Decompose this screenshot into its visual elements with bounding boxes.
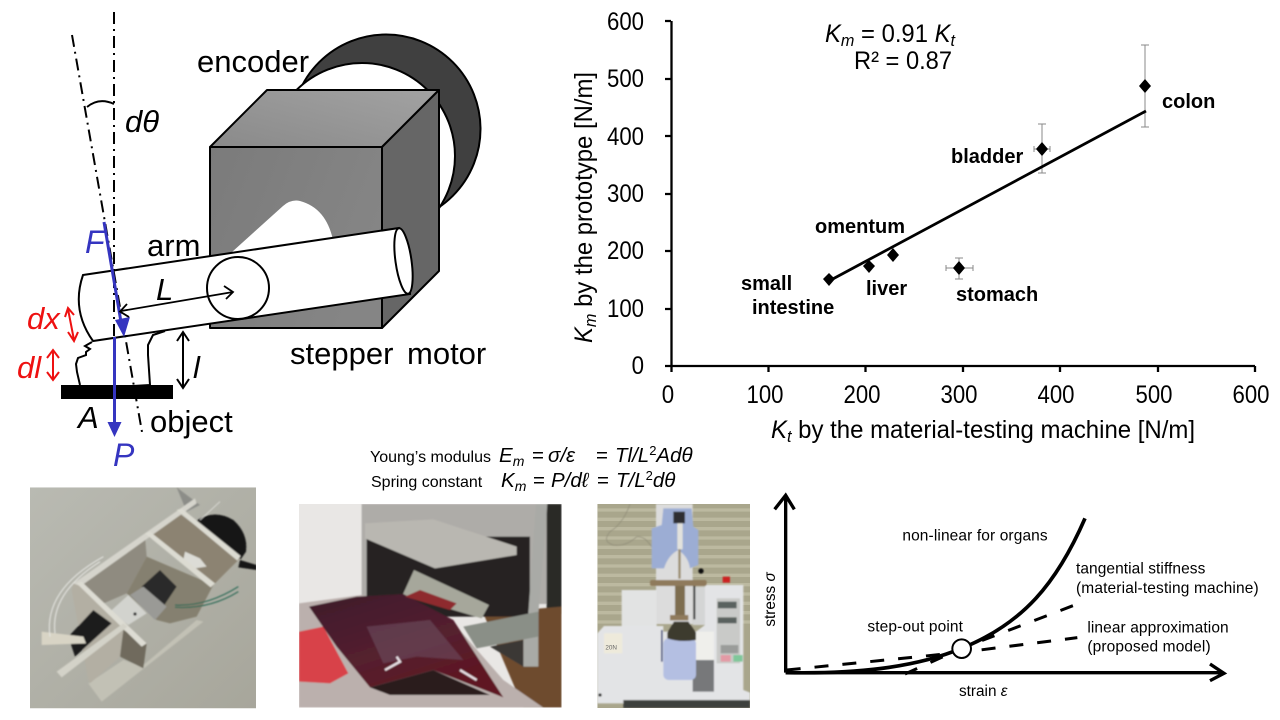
x axis label: strain ε: [959, 683, 1008, 700]
label: A: A: [76, 400, 99, 435]
spring constant equation: m: [515, 478, 527, 494]
y tick labels: 600: [607, 8, 644, 36]
regression equation: = 0.91: [854, 20, 935, 48]
vertical reference line: [113, 12, 115, 338]
regression equation: K: [825, 20, 854, 50]
organ labels: colon: [1162, 91, 1215, 113]
organ labels: intestine: [752, 297, 834, 319]
label: encoder: encoder: [197, 44, 309, 79]
y tick labels: [607, 8, 644, 380]
linear approximation line: [787, 638, 1077, 670]
organ labels: small: [741, 273, 792, 295]
Young's modulus equation: =: [532, 444, 544, 467]
label: F: F: [85, 224, 107, 260]
Young's modulus equation: Tl/L: [615, 444, 649, 467]
y tick labels: 300: [607, 180, 644, 208]
y axis title: by the prototype [N/m]: [570, 72, 598, 314]
tangential stiffness line: [905, 604, 1077, 674]
label: step-out point: step-out point: [867, 619, 964, 636]
spring constant equation: P/dℓ: [551, 469, 590, 492]
regression equation: t: [950, 31, 956, 50]
tilted reference line: [72, 35, 142, 432]
label: dx: dx: [27, 301, 61, 336]
label: arm: arm: [147, 228, 200, 263]
angle arc: [87, 101, 114, 107]
label: stepper motor: stepper: [290, 336, 393, 371]
arrow: length L: [120, 286, 233, 317]
organ labels: stomach: [956, 284, 1038, 306]
organ labels: [741, 91, 1215, 319]
panel: mechanism diagram: [17, 12, 486, 473]
label: linear approximation: linear approximation: [1087, 619, 1229, 636]
spring constant equation: 2: [646, 468, 653, 483]
y axis label: stress σ: [762, 572, 779, 627]
step-out point marker: [952, 639, 971, 658]
chart axes: [665, 21, 1255, 372]
panel: stress-strain chart: [762, 495, 1259, 700]
x tick labels: 100: [746, 381, 784, 409]
non-linear curve: [786, 518, 1085, 673]
Young's modulus equation: m: [513, 453, 525, 469]
icon: base plate: [61, 385, 173, 399]
organ labels: omentum: [815, 216, 905, 238]
icon: object tissue outline: [76, 331, 165, 386]
regression equation: m: [841, 31, 854, 50]
icon: stepper motor box: [210, 90, 439, 328]
equations block: [370, 443, 693, 494]
y tick labels: 0: [632, 352, 644, 380]
label: dl: dl: [17, 350, 42, 385]
arrow: dx: [65, 308, 78, 341]
photo: material testing machine: [597, 504, 750, 708]
data points: [823, 79, 1151, 286]
Young's modulus equation: E: [499, 444, 513, 467]
chart axes: [775, 495, 1224, 681]
organ labels: liver: [866, 278, 907, 300]
spring constant equation: =: [533, 469, 545, 492]
label: linear approximation: (proposed model): [1087, 639, 1211, 656]
x axis title: by the material-testing machine [N/m]: [792, 416, 1195, 444]
label: stepper motor: motor: [407, 336, 486, 371]
label: P: P: [113, 437, 135, 473]
x tick labels: 200: [844, 381, 880, 409]
y axis title: K: [570, 314, 600, 343]
photo: organ measurement: [299, 504, 562, 708]
Young's modulus equation: Adθ: [654, 444, 693, 467]
arrow: force P: [108, 337, 122, 437]
error bars: [946, 45, 1149, 279]
x tick labels: 400: [1038, 381, 1074, 409]
label: non-linear: non-linear for organs: [902, 528, 1048, 545]
R squared: R² = 0.87: [854, 47, 952, 75]
label: L: L: [156, 272, 173, 307]
y axis title: m: [581, 314, 600, 327]
x axis title: K: [771, 416, 793, 446]
y tick labels: 200: [607, 237, 644, 265]
spring constant equation: K: [501, 469, 516, 492]
spring constant equation: dθ: [653, 469, 675, 492]
Young's modulus equation: Young’s modulus: [370, 449, 491, 466]
x tick labels: [662, 381, 1270, 409]
y tick labels: 400: [607, 123, 644, 151]
label: l: l: [193, 350, 201, 385]
regression equation: K: [935, 20, 956, 50]
label: d-theta: dθ: [125, 104, 159, 139]
y tick labels: 500: [607, 65, 644, 93]
label: tangential stiffness: tangential stiffness: [1076, 561, 1206, 578]
x tick labels: 300: [940, 381, 978, 409]
arrow: dl: [47, 350, 59, 380]
y tick labels: 100: [607, 295, 644, 323]
organ labels: bladder: [951, 146, 1023, 168]
photo: material testing machine: 20N: [605, 644, 617, 651]
label: tangential stiffness: (material-testing machine): [1076, 580, 1259, 597]
x tick labels: 500: [1136, 381, 1172, 409]
Young's modulus equation: 2: [649, 443, 656, 458]
icon: cylindrical arm: [79, 227, 416, 341]
arrow: force F: [104, 222, 130, 337]
spring constant equation: Spring constant: [371, 474, 483, 491]
arrow: length l: [177, 332, 189, 388]
x tick labels: 600: [1232, 381, 1270, 409]
Young's modulus equation: σ/ε: [548, 444, 576, 467]
Young's modulus equation: =: [596, 444, 608, 467]
label: object: object: [150, 404, 233, 439]
trend line: [829, 111, 1146, 281]
spring constant equation: T/L: [616, 469, 646, 492]
panel: scatter chart: [570, 8, 1270, 446]
x tick labels: 0: [662, 381, 674, 409]
x axis title: t: [787, 427, 793, 446]
photo: prototype device: [30, 487, 257, 708]
spring constant equation: =: [597, 469, 609, 492]
icon: encoder disc: [269, 34, 480, 249]
